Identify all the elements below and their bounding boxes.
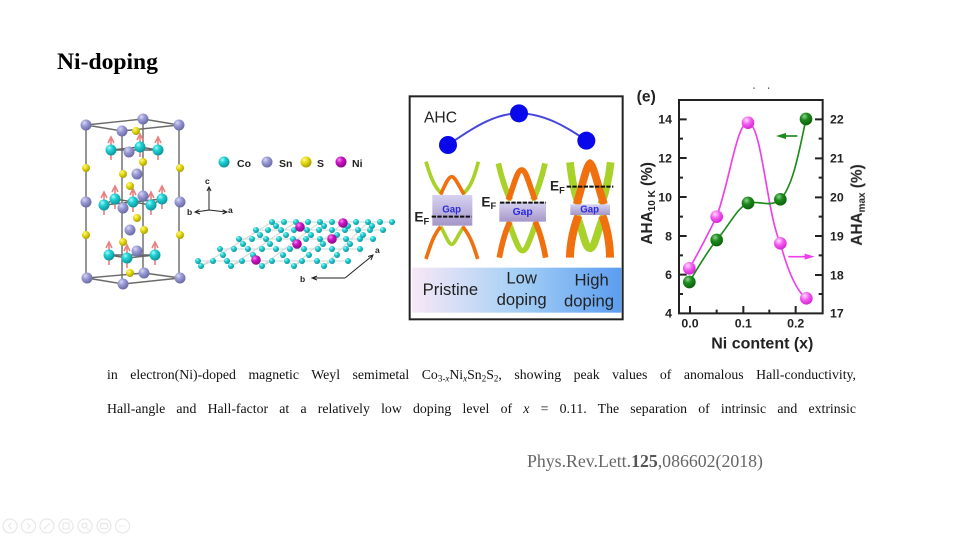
chart: AHA versus Ni content xyxy=(637,87,868,353)
body text line 2: Hall-angle and Hall-factor at a relatively low doping level of x = 0.11. The separation of intrinsic and extrinsic xyxy=(107,401,856,416)
lattice direction arrows xyxy=(312,255,373,280)
x axis values xyxy=(681,317,804,331)
Sn atoms xyxy=(80,114,186,290)
citation: Phys.Rev.Lett.125,086602(2018) xyxy=(527,451,763,471)
high doping bands xyxy=(567,162,613,258)
doping gradient band xyxy=(412,268,621,313)
icon: next xyxy=(22,519,36,533)
left axis values xyxy=(658,113,672,321)
low doping Fermi level label: E xyxy=(481,194,490,209)
low doping gap label: Gap xyxy=(513,207,533,218)
arrow: green series to left axis xyxy=(776,133,797,139)
small marks above chart xyxy=(754,87,769,89)
label: high doping xyxy=(564,271,614,311)
left axis title: AHA xyxy=(639,211,656,245)
legend: atom species: Sn xyxy=(279,158,292,170)
icon: more xyxy=(116,519,130,533)
pristine Fermi level label: E xyxy=(414,210,423,225)
x axis values: 0.1 xyxy=(735,317,752,331)
panel: Ni-doped kagome lattice xyxy=(195,218,395,284)
x axis values: 0.0 xyxy=(681,317,699,331)
label: low doping: doping xyxy=(497,290,547,309)
pristine Fermi level label: F xyxy=(423,216,429,226)
label: pristine: Pristine xyxy=(423,280,478,299)
arrow: magenta series to right axis xyxy=(788,254,815,260)
icon: slides xyxy=(59,519,73,533)
right axis values: 17 xyxy=(830,307,844,321)
low doping Fermi level label: F xyxy=(490,201,496,211)
left axis title: 10 K xyxy=(647,189,658,211)
axes: a b c xyxy=(187,176,233,217)
high doping Fermi level label: F xyxy=(559,185,565,195)
panel: crystal structure xyxy=(80,114,186,290)
lattice bonds xyxy=(198,222,392,266)
legend: atom species: Ni xyxy=(352,158,363,170)
left axis values: 12 xyxy=(658,151,672,165)
label: low doping xyxy=(497,269,547,309)
right axis title: (%) xyxy=(849,164,866,192)
axes: a b c: a xyxy=(228,205,233,215)
green series xyxy=(683,113,812,288)
panel: AHC band schematic xyxy=(410,96,623,319)
presentation toolbar xyxy=(3,519,130,533)
Co atoms xyxy=(98,142,168,264)
right axis values: 22 xyxy=(830,113,844,127)
icon: zoom xyxy=(78,519,92,533)
right axis values: 20 xyxy=(830,191,844,205)
high doping gap label: Gap xyxy=(580,204,599,215)
axes: a b c: b xyxy=(187,207,192,217)
left axis values: 14 xyxy=(658,113,672,127)
x axis title: Ni content (x) xyxy=(711,336,813,353)
legend: atom species: Co xyxy=(237,158,251,170)
high doping Fermi level label: E xyxy=(550,179,559,194)
left axis title: (%) xyxy=(639,162,656,190)
right axis values xyxy=(830,113,844,321)
icon: screen xyxy=(97,519,111,533)
label a: a xyxy=(375,245,380,255)
AHC curve xyxy=(439,104,595,154)
label: high doping: High xyxy=(575,271,609,290)
right axis title: max xyxy=(857,192,868,212)
plot frame and ticks xyxy=(679,100,823,313)
legend: atom species: S xyxy=(317,158,324,170)
crystal bonds xyxy=(104,147,162,258)
icon: pen xyxy=(40,519,54,533)
left axis values: 6 xyxy=(665,268,672,282)
pristine bands xyxy=(426,162,478,259)
pristine gap label: Gap xyxy=(442,205,461,216)
icon: previous xyxy=(3,519,17,533)
magnetic moment arrows xyxy=(101,134,165,268)
body text line 1: in electron(Ni)-doped magnetic Weyl semimetal Co3-xNixSn2S2, showing peak values of anomalous Hall-conductivity, xyxy=(107,367,856,384)
label: high doping: doping xyxy=(564,292,614,311)
low doping bands xyxy=(498,163,546,258)
panel frame xyxy=(410,96,623,319)
x axis values: 0.2 xyxy=(787,317,804,331)
right axis values: 21 xyxy=(830,152,844,166)
right axis title: AHA xyxy=(849,212,866,246)
S atoms xyxy=(82,127,184,277)
left axis values: 4 xyxy=(665,307,672,321)
nickel dopant sites xyxy=(251,218,348,265)
right axis values: 19 xyxy=(830,229,844,243)
label b: b xyxy=(300,274,305,284)
chart label (e): (e) xyxy=(637,88,656,105)
title: Ni-doping xyxy=(57,49,158,75)
magenta series xyxy=(683,116,813,305)
legend: atom species xyxy=(218,156,363,170)
AHC label: AHC xyxy=(424,109,457,126)
left axis values: 8 xyxy=(665,229,672,243)
left axis values: 10 xyxy=(658,190,672,204)
label: low doping: Low xyxy=(506,269,538,288)
cobalt sites xyxy=(195,219,395,269)
crystal frame xyxy=(86,119,180,284)
axes: a b c: c xyxy=(205,176,210,186)
right axis values: 18 xyxy=(830,268,844,282)
